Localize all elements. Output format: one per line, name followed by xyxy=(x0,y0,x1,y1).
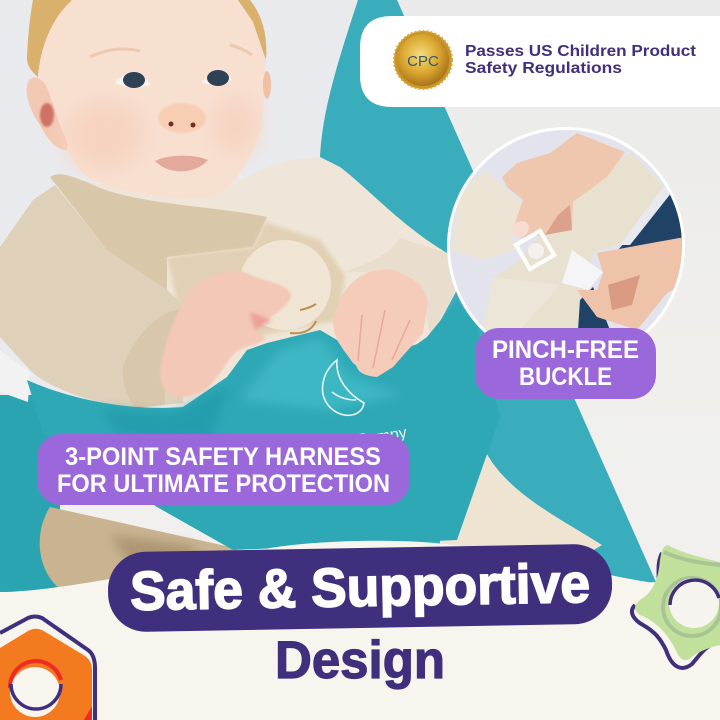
eyebrows xyxy=(90,45,252,57)
baby xyxy=(0,157,602,600)
baby hands xyxy=(160,269,428,397)
title line 1: Safe & Supportive xyxy=(129,552,591,622)
pinch-free label xyxy=(475,328,656,399)
badge text xyxy=(465,43,697,77)
right cuff xyxy=(343,238,457,335)
cream wave footer xyxy=(0,541,720,720)
baby head xyxy=(27,0,271,198)
sweater body xyxy=(60,157,457,405)
harness xyxy=(27,300,500,550)
knit collar xyxy=(50,174,267,290)
right leg xyxy=(440,440,602,570)
badge text: Safety Regulations xyxy=(465,60,622,77)
lower knit leg xyxy=(40,507,270,600)
icon: green star teether xyxy=(632,545,720,668)
brand logo on harness xyxy=(322,360,364,415)
main cream fabric xyxy=(483,153,663,330)
icon: CPC gold seal: CPC xyxy=(407,53,439,70)
navy background xyxy=(578,193,682,328)
icon: CPC gold seal xyxy=(394,31,452,89)
right hand xyxy=(333,269,428,377)
icon: orange hexagon teether xyxy=(0,616,95,720)
buckle pieces xyxy=(516,231,554,269)
badge text: Passes US Children Product xyxy=(465,43,697,60)
certification badge xyxy=(360,16,720,107)
buckle photo circle xyxy=(447,127,685,333)
eyes xyxy=(115,70,232,88)
upper hand xyxy=(502,133,625,238)
light stripe xyxy=(620,187,672,245)
headband xyxy=(27,0,266,77)
nose xyxy=(158,103,206,133)
left cuff xyxy=(123,307,190,408)
lion applique xyxy=(167,222,345,340)
left hand xyxy=(160,271,291,397)
lower hand xyxy=(577,236,690,330)
harness label xyxy=(37,434,410,505)
harness label: FOR ULTIMATE PROTECTION xyxy=(57,470,390,498)
harness: ftyBumpy xyxy=(340,425,408,452)
title line 2: Design xyxy=(275,631,445,690)
harness label: 3-POINT SAFETY HARNESS xyxy=(65,443,381,471)
left sleeve xyxy=(0,185,185,408)
pinch-free label: BUCKLE xyxy=(519,363,612,391)
title pill xyxy=(107,544,613,632)
pinch-free label: PINCH-FREE xyxy=(492,336,639,364)
white seat strap xyxy=(0,350,30,402)
folded cuff xyxy=(452,170,522,260)
mouth xyxy=(155,156,208,171)
teal seat fabric xyxy=(0,0,656,600)
